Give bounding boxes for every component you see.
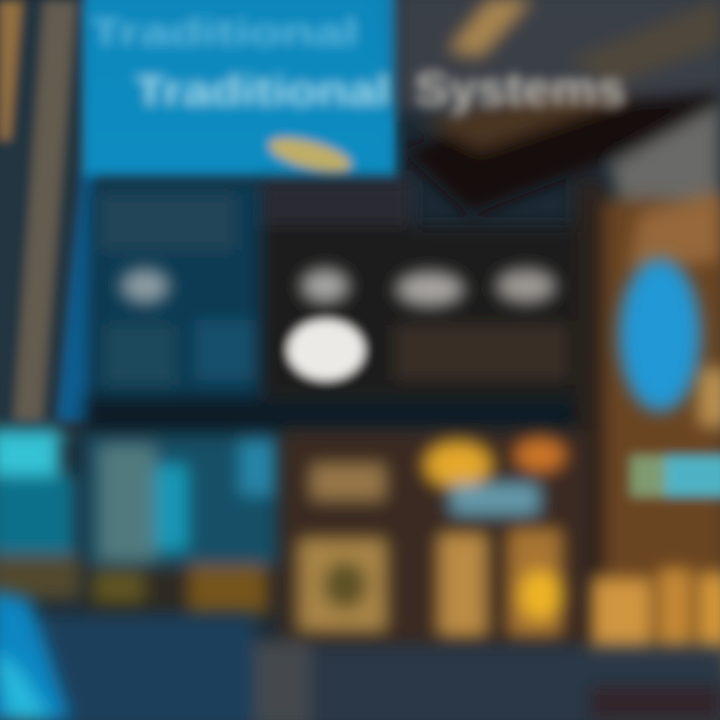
heading: Traditional [90,12,358,54]
panel: left column [0,0,96,440]
panel: dark center table [262,180,597,400]
panel: top right ceiling [396,0,720,225]
icon: blue oval sign [620,259,700,411]
panel: right shopfront [575,180,720,720]
icon: yellow accent [266,132,354,178]
heading: Systems [415,63,625,115]
panel: lower left cyan corner [0,430,80,600]
panel: dark teal table [85,180,595,435]
icon: white blob [288,320,364,380]
panel: blue heading banner [84,0,396,176]
heading: Traditional [135,67,390,114]
icon: bottom left cyan swoosh [0,590,70,720]
panel: lower teal windows [85,435,285,615]
panel: lower center shops [280,430,590,650]
panel: right cyan strip [630,455,720,497]
heading [90,12,625,115]
panel: bottom floor [0,615,720,720]
small labels row [121,269,556,306]
